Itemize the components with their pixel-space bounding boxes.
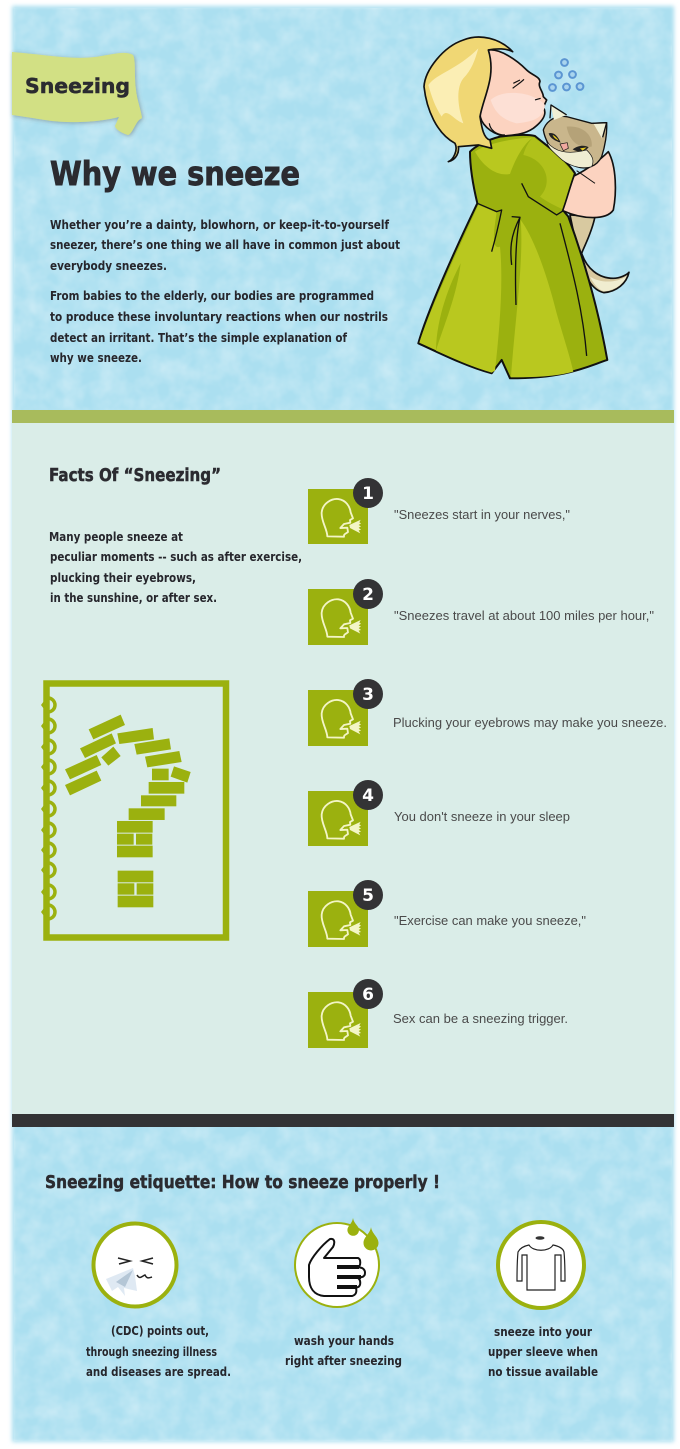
- text block: intro: From babies to the elderly, our bodies are programmed: [50, 289, 374, 303]
- fact 4: 4: [362, 786, 374, 806]
- text block: intro: Whether you’re a dainty, blowhorn, or keep-it-to-yourself: [50, 218, 390, 232]
- text block: intro: sneezer, there’s one thing we all have in common just about: [50, 238, 400, 252]
- fact 1: "Sneezes start in your nerves,": [394, 507, 570, 522]
- illustration: girl hugging cat: [418, 37, 629, 378]
- fact 4: You don't sneeze in your sleep: [394, 809, 570, 824]
- icon: cat head: [543, 116, 607, 168]
- banner: Sneezing tag: [12, 52, 142, 135]
- icon: wet hand: [295, 1218, 379, 1307]
- caption: wash hands: wash your hands: [294, 1334, 394, 1348]
- fact 3: 3: [362, 685, 374, 705]
- fact 6: 6: [362, 985, 374, 1005]
- fact 1: [308, 478, 570, 544]
- icon: long sleeve shirt: [498, 1222, 584, 1308]
- icon: face: [480, 50, 547, 136]
- text block: intro: detect an irritant. That’s the simple explanation of: [50, 331, 348, 345]
- text block: intro: why we sneeze.: [50, 351, 142, 365]
- caption: sleeve: [488, 1325, 598, 1379]
- fact 1: 1: [362, 484, 374, 504]
- icon: sneezing face: [94, 1224, 176, 1306]
- icon: cat tail and body: [570, 215, 629, 293]
- fact 5: "Exercise can make you sneeze,": [394, 913, 586, 928]
- caption: CDC: (CDC) points out,: [111, 1324, 209, 1338]
- fact 6: Sex can be a sneezing trigger.: [393, 1011, 568, 1026]
- divider: dark band: [12, 1114, 674, 1127]
- icon: hair: [424, 37, 513, 162]
- icon: sneeze droplets: [549, 59, 583, 91]
- fact 5: [308, 880, 586, 947]
- text block: intro: everybody sneezes.: [50, 259, 167, 273]
- icon: dress: [418, 135, 607, 378]
- caption: CDC: [86, 1324, 231, 1379]
- banner: Sneezing tag: Sneezing: [25, 74, 130, 98]
- icon: question mark notebook: [41, 684, 226, 938]
- text block: peculiar moments: Many people sneeze at: [49, 530, 183, 544]
- caption: sleeve: upper sleeve when: [488, 1345, 598, 1359]
- fact 2: "Sneezes travel at about 100 miles per hour,": [394, 608, 654, 623]
- icon: arm: [563, 152, 615, 218]
- text block: intro: to produce these involuntary reactions when our nostrils: [50, 310, 388, 324]
- caption: wash hands: right after sneezing: [285, 1354, 402, 1368]
- panel: facts background: [12, 423, 674, 1114]
- fact 2: 2: [362, 585, 374, 605]
- caption: sleeve: sneeze into your: [494, 1325, 592, 1339]
- fact 2: [308, 579, 654, 645]
- heading: facts: Facts Of “Sneezing”: [49, 465, 221, 486]
- fact 3: [308, 679, 667, 746]
- caption: CDC: and diseases are spread.: [86, 1365, 231, 1379]
- text block: peculiar moments: plucking their eyebrows,: [50, 571, 196, 585]
- caption: sleeve: no tissue available: [488, 1365, 598, 1379]
- title: Why we sneeze: [50, 154, 300, 193]
- fact 6: [308, 979, 568, 1048]
- text block: peculiar moments: in the sunshine, or after sex.: [50, 591, 217, 605]
- fact 4: [308, 780, 570, 846]
- text block: peculiar moments: [49, 530, 302, 605]
- heading: etiquette: Sneezing etiquette: How to sneeze properly !: [45, 1172, 440, 1193]
- divider: olive band: [12, 410, 674, 423]
- text block: peculiar moments: peculiar moments -- such as after exercise,: [50, 550, 302, 564]
- text block: intro: [50, 218, 400, 365]
- caption: CDC: through sneezing illness: [86, 1345, 217, 1359]
- caption: wash hands: [285, 1334, 402, 1368]
- fact 3: Plucking your eyebrows may make you sneeze.: [393, 715, 667, 730]
- fact 5: 5: [362, 886, 374, 906]
